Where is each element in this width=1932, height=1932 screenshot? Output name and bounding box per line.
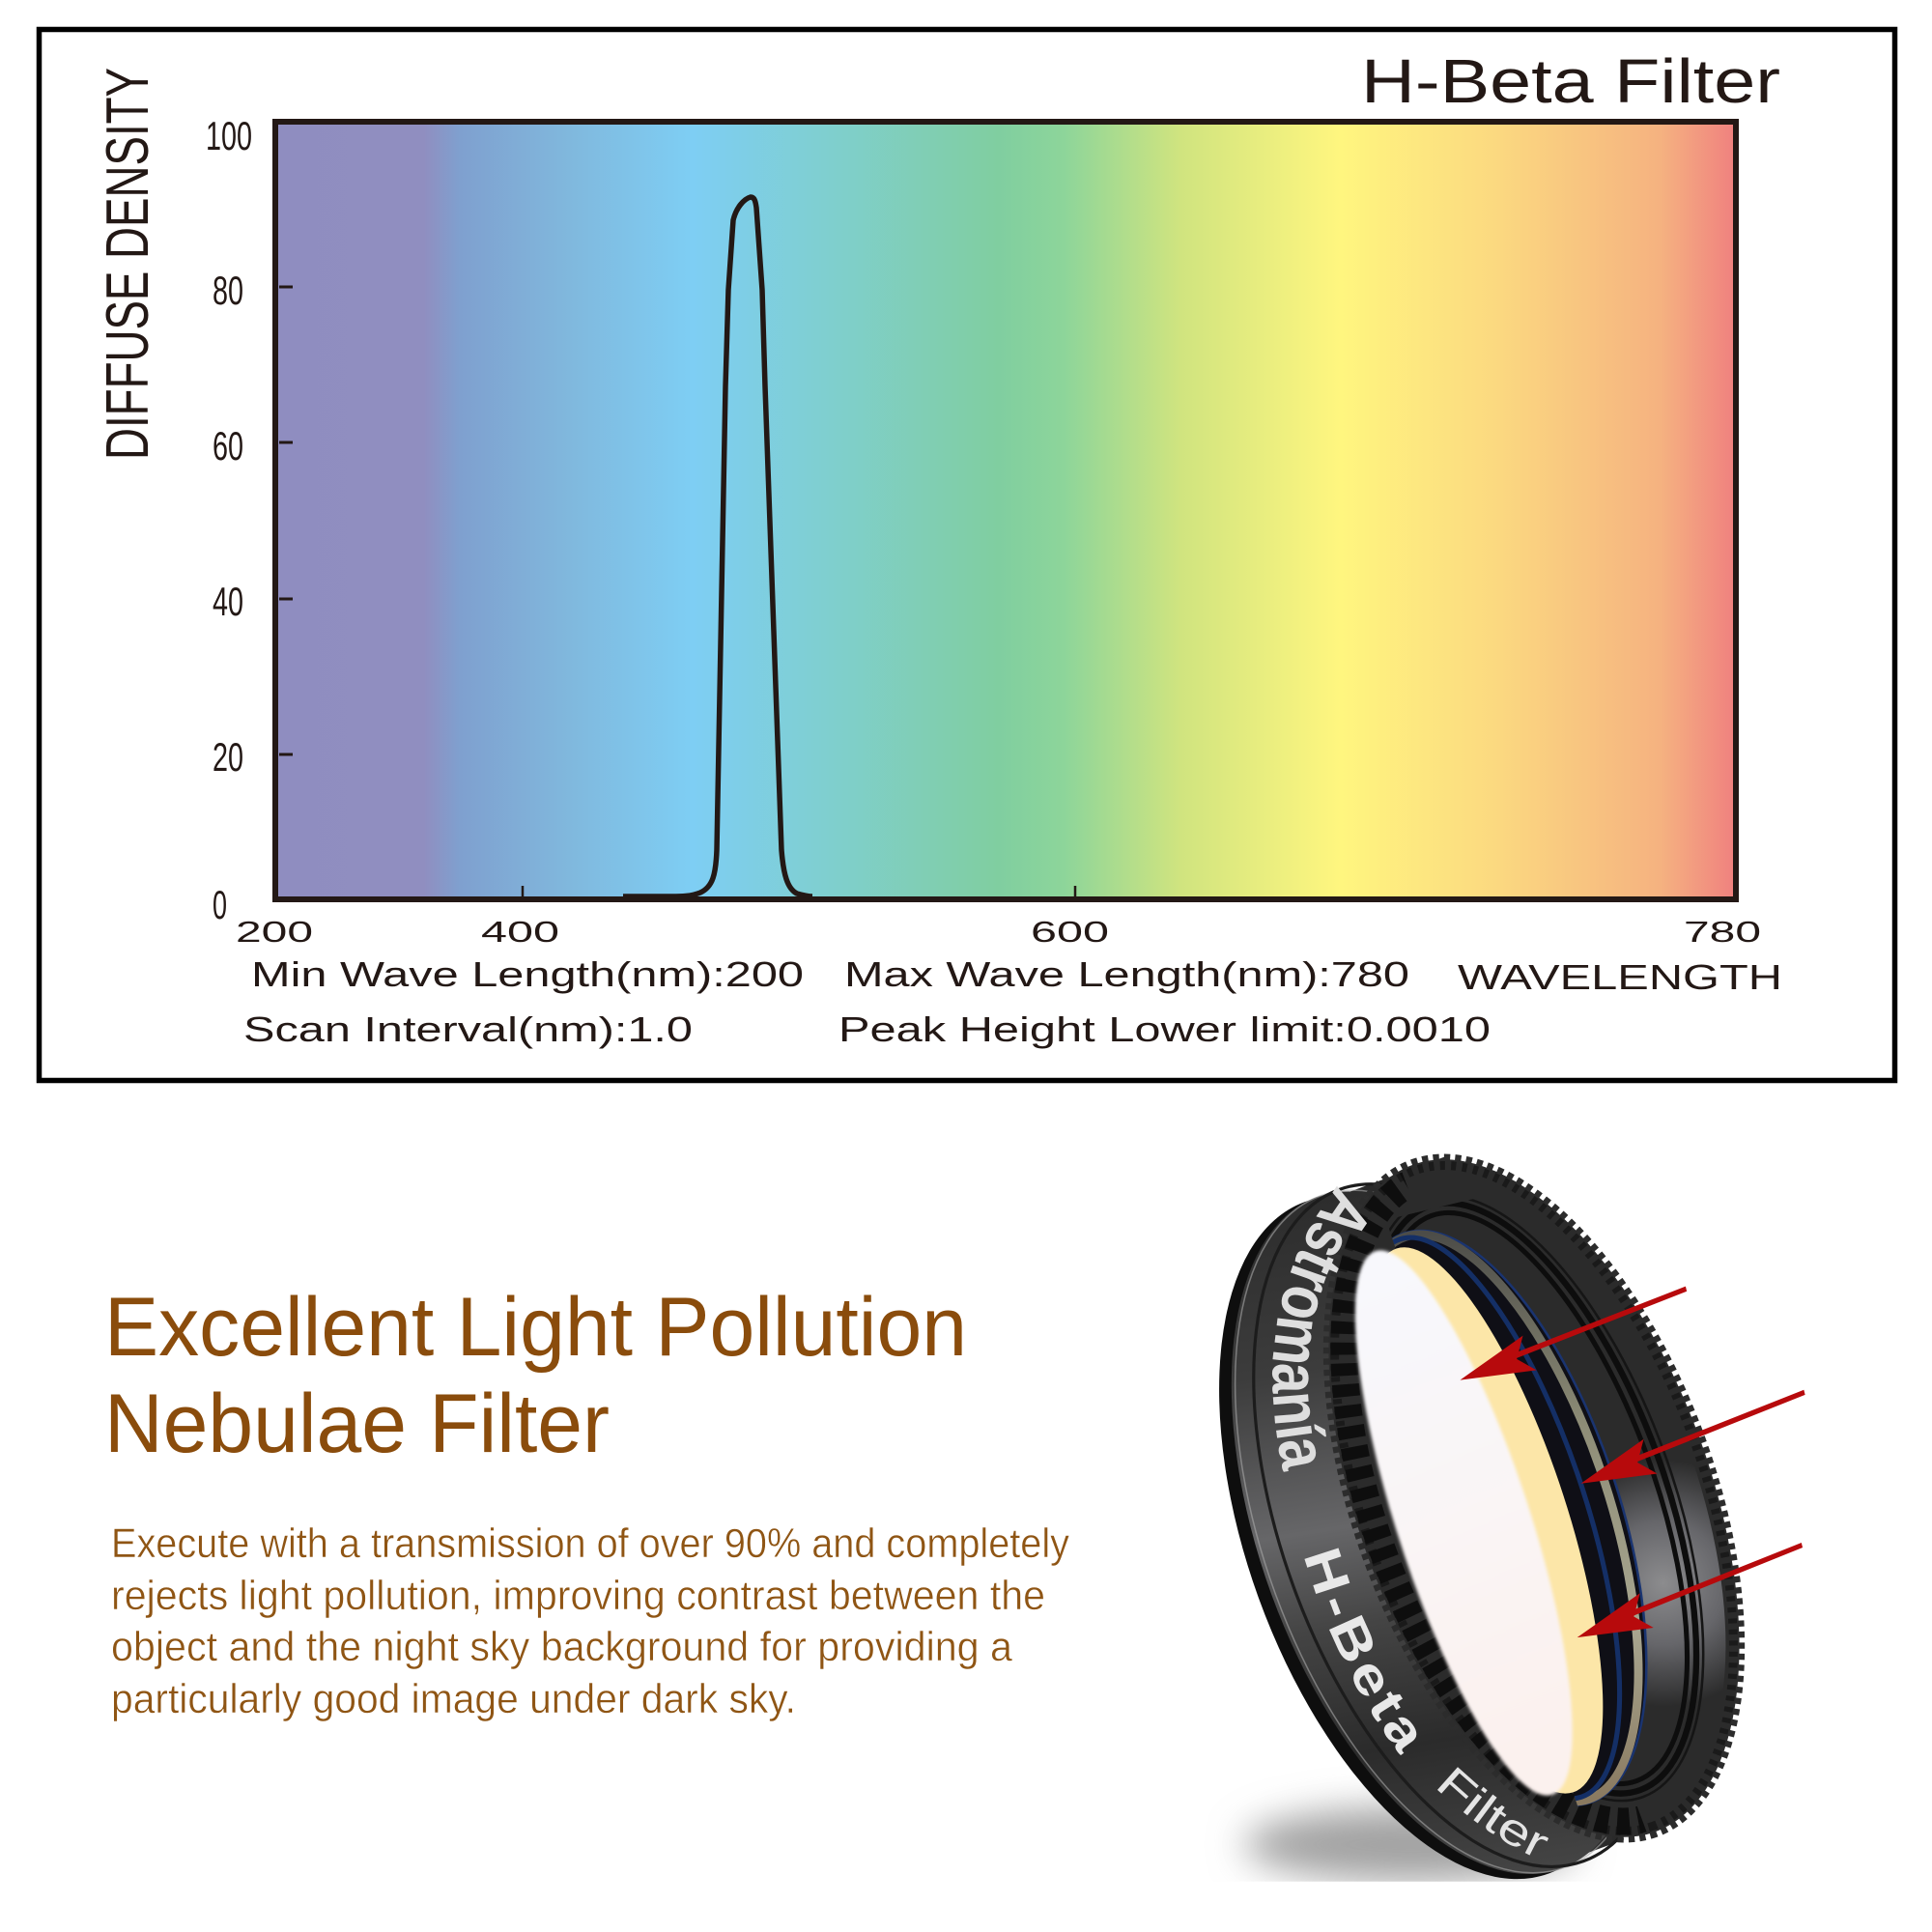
x axis labels	[236, 915, 1761, 949]
heading: Excellent Light Pollution	[104, 1281, 967, 1374]
lens engraving: Astromania	[1271, 1186, 1367, 1472]
title: H-Beta Filter: H-Beta Filter	[1361, 46, 1780, 116]
scan parameters	[243, 954, 1782, 1049]
description text: object and the night sky background for providing a	[111, 1624, 1012, 1670]
transmission curve	[623, 197, 812, 896]
description text: rejects light pollution, improving contrast between the	[111, 1573, 1045, 1619]
y axis labels: 40	[213, 579, 243, 624]
scan parameters: Peak Height Lower limit:0.0010	[838, 1009, 1491, 1049]
lens engraving: Filter: Filter	[1437, 1767, 1548, 1855]
y axis labels: 20	[213, 734, 243, 780]
icon: filter lens	[1219, 1153, 1805, 1882]
y axis labels: 0	[213, 882, 227, 927]
heading: Nebulae Filter	[104, 1378, 610, 1470]
y axis labels: 80	[213, 268, 243, 313]
threaded barrel	[1389, 1199, 1725, 1803]
scan parameters: Min Wave Length(nm):200	[251, 954, 804, 994]
arrow 3	[1577, 1543, 1803, 1637]
x axis labels: 600	[1031, 915, 1109, 949]
description text: particularly good image under dark sky.	[111, 1676, 796, 1722]
description text	[111, 1520, 1069, 1722]
white glass face	[1312, 1231, 1615, 1815]
panel: spectrum chart frame	[39, 29, 1895, 1080]
lens engraving: Astromania: Astromanía	[1271, 1186, 1367, 1472]
lens engraving: H-Beta: H-Beta	[1304, 1548, 1416, 1755]
x axis labels: 780	[1684, 915, 1761, 949]
x axis labels: 200	[236, 915, 313, 949]
heading	[104, 1281, 967, 1470]
y axis labels: 60	[213, 423, 243, 469]
x axis labels: 400	[481, 915, 559, 949]
lens body	[1219, 1157, 1625, 1880]
knurled ring	[1323, 1153, 1745, 1843]
spectrum plot	[275, 122, 1736, 899]
scan parameters: Max Wave Length(nm):780	[844, 954, 1409, 994]
y axis labels: 100	[206, 113, 252, 158]
scan parameters: Scan Interval(nm):1.0	[243, 1009, 693, 1049]
inner cell with coatings	[1392, 1229, 1648, 1806]
scan parameters: WAVELENGTH	[1458, 957, 1782, 997]
description text: Execute with a transmission of over 90% and completely	[111, 1520, 1069, 1567]
y axis labels	[206, 113, 252, 927]
arrow 1	[1460, 1287, 1687, 1380]
yellow glass edge	[1318, 1223, 1652, 1818]
arrow 2	[1580, 1390, 1805, 1484]
